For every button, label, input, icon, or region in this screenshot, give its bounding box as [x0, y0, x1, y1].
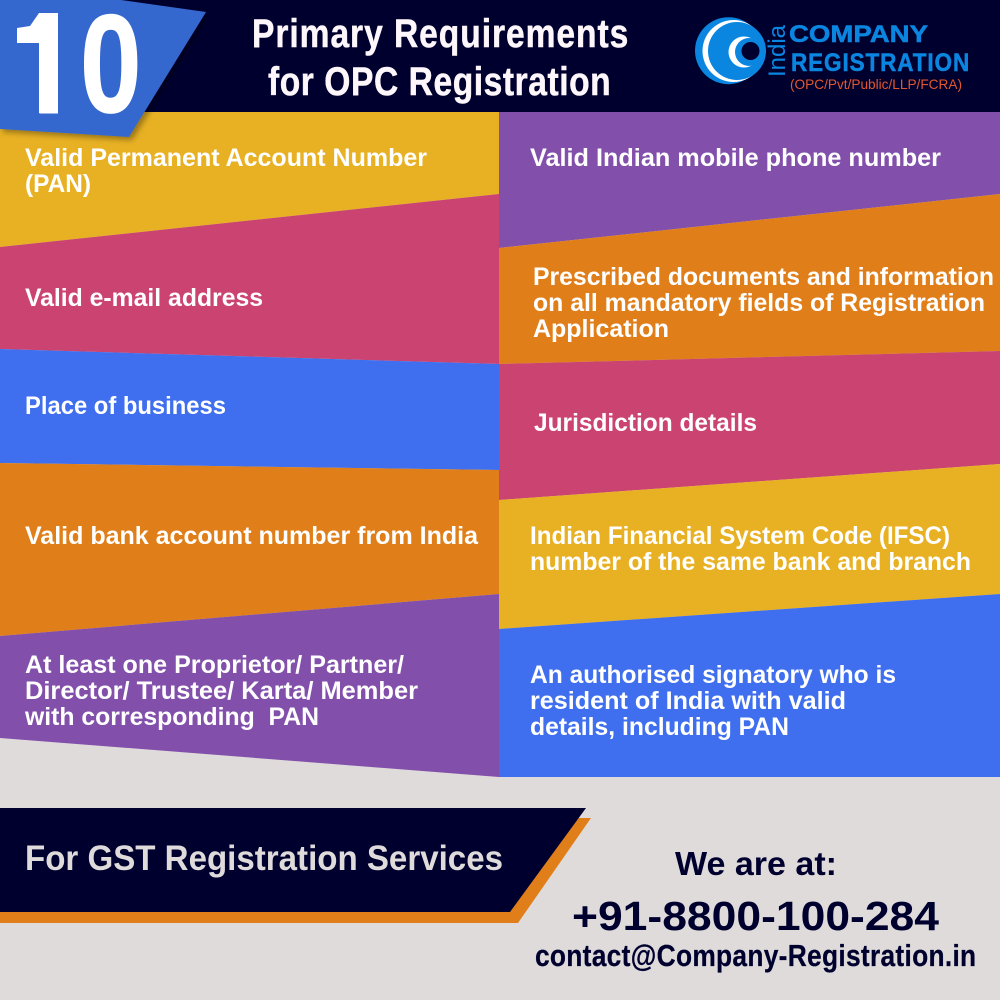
contact block: contact@Company-Registration.in [535, 939, 976, 974]
logo text: entity types: (OPC/Pvt/Public/LLP/FCRA) [790, 76, 962, 92]
panel: jurisdiction: Jurisdiction details [534, 409, 757, 437]
logo text: REGISTRATION: REGISTRATION [791, 49, 969, 77]
panel: place of business [0, 349, 499, 470]
panel: bank account [0, 463, 499, 636]
panel: documents [499, 194, 1000, 364]
icon: crescent rings [695, 17, 766, 84]
panel: documents: Application [533, 315, 669, 343]
panel: left column [0, 112, 499, 777]
panel: mobile: Valid Indian mobile phone number [530, 144, 941, 172]
contact block [535, 845, 976, 974]
panel: IFSC: Indian Financial System Code (IFSC) [530, 522, 950, 550]
panel: IFSC: number of the same bank and branch [530, 548, 971, 576]
panel: signatory: An authorised signatory who is [530, 661, 896, 689]
panel: PAN: Valid Permanent Account Number [25, 144, 427, 172]
badge: number 10 [0, 0, 206, 142]
title: Primary Requirements [252, 11, 628, 56]
contact block: We are at: [675, 845, 837, 882]
panel: IFSC [499, 464, 1000, 629]
title: for OPC Registration [268, 59, 611, 104]
panel: signatory: resident of India with valid [530, 687, 846, 715]
panel: documents: Prescribed documents and information [533, 263, 994, 291]
panel: proprietor: Director/ Trustee/ Karta/ Member [25, 677, 418, 705]
panel: mobile [499, 112, 1000, 248]
panel: right column [499, 112, 1000, 777]
title [252, 11, 628, 104]
panel: bank account: Valid bank account number from India [25, 522, 479, 550]
banner: GST services [0, 808, 591, 923]
panel: PAN [0, 112, 499, 247]
panel: proprietor [0, 594, 499, 777]
panel: proprietor: At least one Proprietor/ Partner/ [25, 651, 404, 679]
panel: e-mail [0, 194, 499, 364]
panel: PAN: (PAN) [25, 170, 91, 198]
panel: documents: on all mandatory fields of Registration [533, 289, 985, 317]
contact block: +91-8800-100-284 [572, 893, 939, 939]
panel: proprietor: with corresponding PAN [24, 703, 319, 731]
panel: place of business: Place of business [25, 392, 226, 420]
panel: jurisdiction [499, 351, 1000, 500]
logo: India Company Registration [695, 17, 969, 92]
panel: signatory: details, including PAN [530, 713, 789, 741]
logo text: COMPANY: COMPANY [789, 21, 928, 48]
panel: e-mail: Valid e-mail address [25, 284, 263, 312]
banner: GST services: For GST Registration Services [25, 839, 503, 878]
header band [0, 0, 1000, 113]
logo text: India: India [764, 24, 791, 77]
panel: signatory [499, 594, 1000, 777]
